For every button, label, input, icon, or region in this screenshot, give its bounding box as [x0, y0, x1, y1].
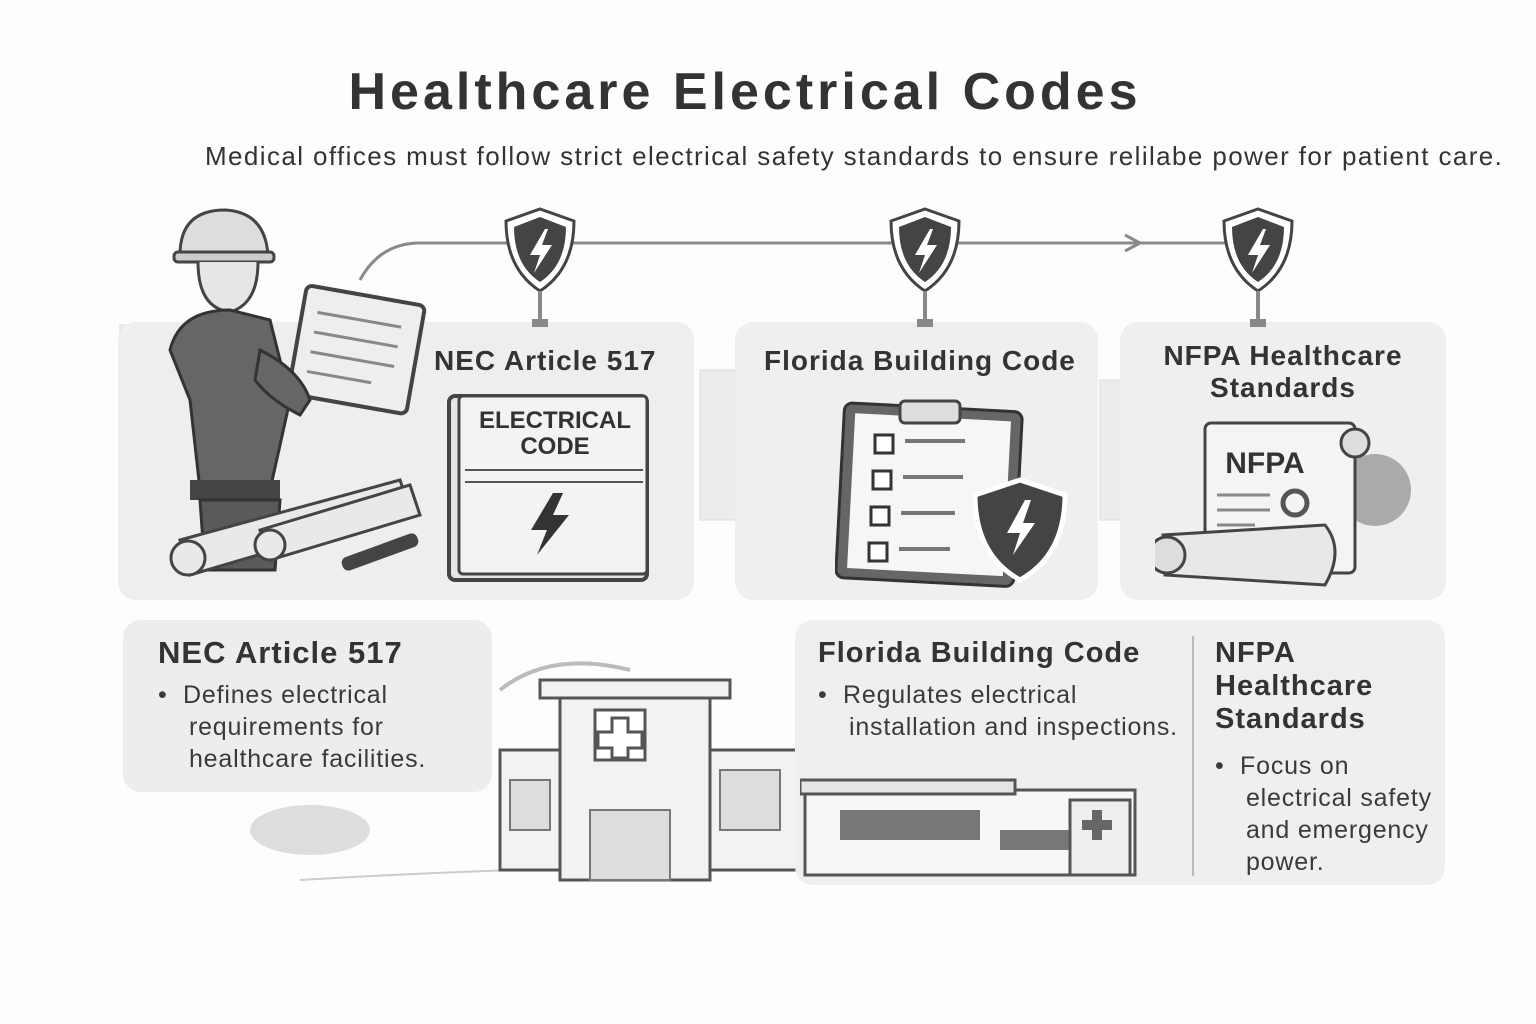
- icon: shield 3: [1222, 207, 1294, 327]
- heading: NFPA top: [1163, 340, 1403, 403]
- text: NEC description: requirements for: [189, 713, 384, 741]
- icon: checklist clipboard with shield: [835, 400, 1068, 588]
- heading: NEC top: NEC Article 517: [434, 345, 656, 376]
- heading: NFPA bottom: Standards: [1215, 703, 1366, 735]
- panel: Florida top: [735, 322, 1098, 600]
- icon: shield 2: [890, 207, 960, 327]
- heading: Florida bottom: Florida Building Code: [818, 637, 1140, 669]
- heading: NFPA top: Standards: [1210, 372, 1356, 403]
- text: NEC description: healthcare facilities.: [189, 745, 426, 773]
- heading: NFPA bottom: Healthcare: [1215, 670, 1373, 702]
- heading: NFPA top: NFPA Healthcare: [1163, 340, 1403, 371]
- icon: electrical code book: CODE: [520, 433, 590, 460]
- text: NFPA description: [1215, 752, 1432, 876]
- text: NFPA description: • Focus on: [1215, 752, 1349, 780]
- icon: NFPA scroll and gear: [1155, 422, 1411, 586]
- icon: electrical code book: ELECTRICAL: [479, 407, 631, 434]
- divider: [1192, 636, 1194, 876]
- icon: medical office building: [800, 778, 1136, 876]
- subtitle: Medical offices must follow strict electrical safety standards to ensure relilabe power for patient care.: [205, 141, 1503, 171]
- text: NEC description: [158, 681, 426, 773]
- panel: NFPA top: [1120, 322, 1446, 600]
- icon: NFPA scroll and gear: NFPA: [1225, 447, 1305, 480]
- panel: NEC top: [118, 322, 694, 600]
- text: NFPA description: electrical safety: [1246, 784, 1432, 812]
- text: Florida description: installation and inspections.: [849, 713, 1178, 741]
- heading: NFPA bottom: [1215, 637, 1373, 735]
- heading: NFPA bottom: NFPA: [1215, 637, 1296, 669]
- heading: NEC bottom: NEC Article 517: [158, 635, 403, 670]
- text: Florida description: • Regulates electrical: [818, 681, 1077, 709]
- heading: Florida top: Florida Building Code: [764, 345, 1076, 376]
- panel: NEC bottom card: [123, 620, 492, 792]
- icon: electrician with blueprints: [168, 208, 426, 577]
- icon: shield 1: [504, 207, 576, 327]
- text: NFPA description: power.: [1246, 848, 1324, 876]
- title: Healthcare Electrical Codes: [348, 63, 1142, 121]
- text: Florida description: [818, 681, 1178, 741]
- panel: Florida and NFPA bottom card: [795, 620, 1445, 885]
- icon: hospital building: [250, 661, 796, 882]
- text: NEC description: • Defines electrical: [158, 681, 388, 709]
- text: NFPA description: and emergency: [1246, 816, 1429, 844]
- icon: electrical code book: [447, 394, 649, 582]
